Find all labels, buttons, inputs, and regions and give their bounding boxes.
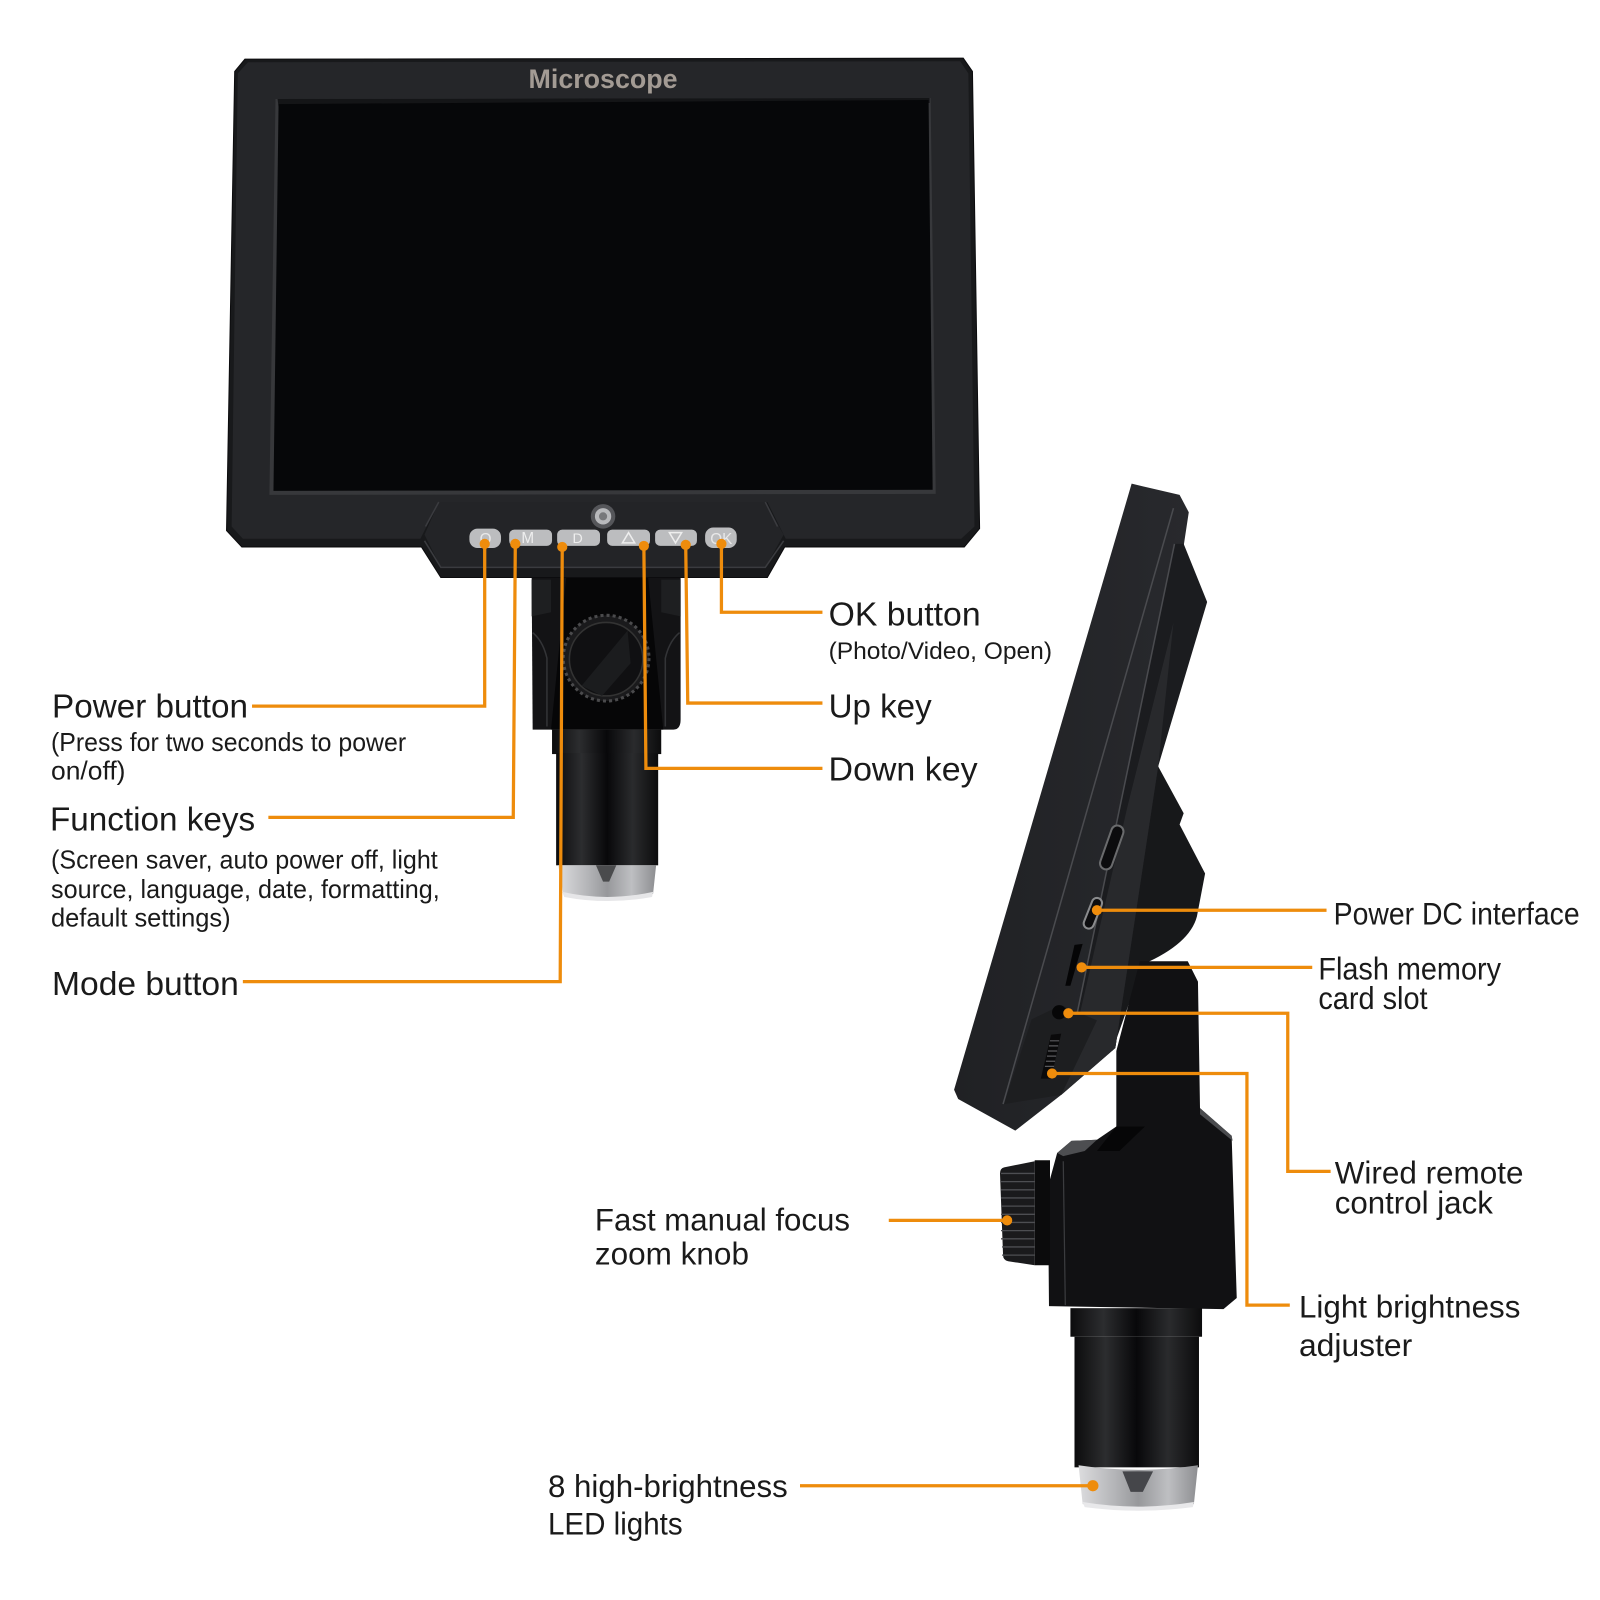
label: focus knob: zoom knob	[595, 1235, 749, 1271]
housing edges	[1057, 1108, 1233, 1305]
monitor body	[227, 58, 980, 578]
monitor back panel	[1061, 544, 1207, 1095]
label: flash memory card slot: Flash memory	[1318, 951, 1501, 987]
label: wired remote control jack	[1335, 1155, 1523, 1220]
label: flash memory card slot	[1318, 951, 1501, 1016]
label: OK button: (Photo/Video, Open)	[829, 638, 1052, 665]
line: wired remote jack	[1063, 1008, 1331, 1171]
label: function keys: (Screen saver, auto power off, light	[51, 846, 438, 874]
LED ring, front	[558, 865, 656, 901]
line: function keys	[268, 539, 520, 817]
label: LED lights: LED lights	[548, 1506, 683, 1542]
monitor side	[954, 484, 1189, 1131]
line: down key	[639, 541, 822, 768]
label: flash memory card slot: card slot	[1318, 980, 1428, 1016]
label: OK button: OK button	[829, 597, 981, 634]
button panel	[424, 502, 784, 567]
USB-C port	[1089, 903, 1097, 923]
line: OK button	[716, 539, 822, 612]
line: power button	[252, 539, 490, 706]
label: LED lights	[548, 1468, 788, 1542]
HDMI port	[1106, 832, 1117, 863]
bezel inner panel	[232, 61, 974, 539]
label: function keys: default settings)	[51, 905, 231, 933]
label: focus knob: Fast manual focus	[595, 1202, 850, 1238]
lens tube, side	[1070, 1308, 1202, 1467]
control buttons: O	[480, 531, 492, 548]
stand bracket	[532, 573, 681, 730]
label: LED lights: 8 high-brightness	[548, 1468, 788, 1504]
control buttons: D	[572, 531, 583, 547]
lens tube, front	[552, 730, 661, 865]
screen	[269, 98, 936, 495]
label: down key: Down key	[829, 752, 978, 789]
line: mode button	[243, 542, 567, 982]
label: power button: Power button	[52, 688, 248, 725]
label: wired remote control jack: control jack	[1335, 1184, 1493, 1220]
line: power DC interface	[1092, 905, 1327, 915]
camera lens	[591, 504, 615, 529]
line: up key	[681, 540, 822, 703]
label: mode button: Mode button	[52, 966, 239, 1003]
card slot	[1065, 944, 1083, 986]
edge highlight	[1003, 508, 1174, 1104]
stand housing	[1048, 961, 1237, 1309]
remote jack	[1052, 1005, 1066, 1019]
label: wired remote control jack: Wired remote	[1335, 1155, 1523, 1191]
label: power button: on/off)	[51, 758, 126, 786]
label: OK button	[829, 597, 1052, 665]
control buttons: OK	[710, 531, 733, 548]
label: power DC interface: Power DC interface	[1334, 895, 1580, 931]
line: flash memory card slot	[1077, 962, 1312, 972]
brightness recess	[1004, 1005, 1097, 1104]
control buttons: M	[521, 530, 534, 547]
brightness wheel	[1041, 1034, 1061, 1079]
LED ring, side	[1079, 1465, 1198, 1511]
side knob	[1000, 1160, 1050, 1265]
brand label: Microscope	[529, 64, 678, 94]
control buttons	[469, 528, 737, 548]
callout lines	[243, 539, 1331, 1491]
port face	[1061, 622, 1173, 1095]
label: up key: Up key	[829, 688, 932, 725]
line: focus knob	[889, 1215, 1012, 1226]
zoom knob, front	[563, 615, 649, 701]
label: power button	[51, 688, 407, 786]
label: focus knob	[595, 1202, 850, 1271]
label: light brightness adjuster	[1299, 1288, 1520, 1363]
label: power button: (Press for two seconds to power	[51, 729, 407, 757]
label: function keys: Function keys	[50, 802, 255, 839]
hinge and rear support	[1020, 766, 1205, 1051]
label: light brightness adjuster: adjuster	[1299, 1327, 1412, 1363]
label: light brightness adjuster: Light brightness	[1299, 1288, 1520, 1324]
label: function keys	[50, 802, 440, 933]
front view: microscope with screen	[227, 58, 980, 901]
line: LED lights	[800, 1480, 1098, 1491]
line: light brightness adjuster	[1047, 1068, 1290, 1305]
side view: microscope	[954, 484, 1237, 1511]
label: function keys: source, language, date, formatting,	[51, 876, 440, 904]
